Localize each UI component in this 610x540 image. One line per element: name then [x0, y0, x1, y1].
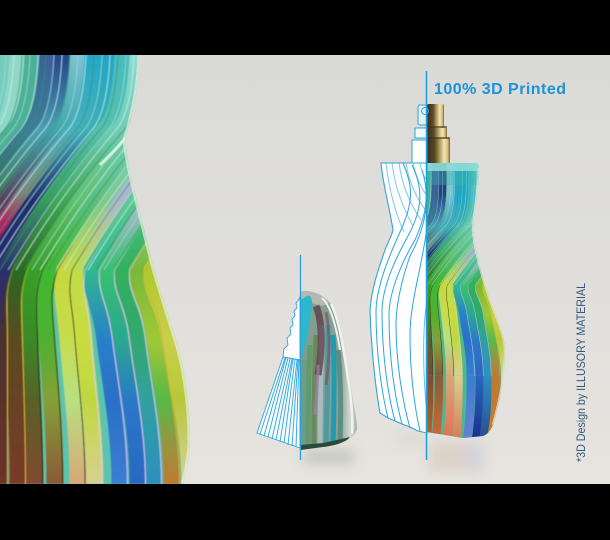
heading: 100% 3D Printed: [434, 81, 566, 98]
vertical design credit: *3D Design by ILLUSORY MATERIAL: [574, 283, 588, 462]
cap: colored right half: [300, 291, 357, 450]
perfume bottle: colored right half: [428, 163, 505, 438]
reflections under bottle and cap: [304, 432, 482, 472]
top black bar: [0, 0, 610, 55]
bottle divider line: [426, 71, 428, 460]
perfume bottle: gold spray pump: [427, 104, 450, 163]
perfume bottle: blueprint left half: [370, 105, 428, 433]
bottom black bar: [0, 484, 610, 540]
cap divider line: [300, 255, 302, 460]
cap: blueprint left half: [257, 297, 300, 448]
background panel: [0, 55, 610, 484]
close-up of iridescent bottle: [0, 55, 190, 484]
